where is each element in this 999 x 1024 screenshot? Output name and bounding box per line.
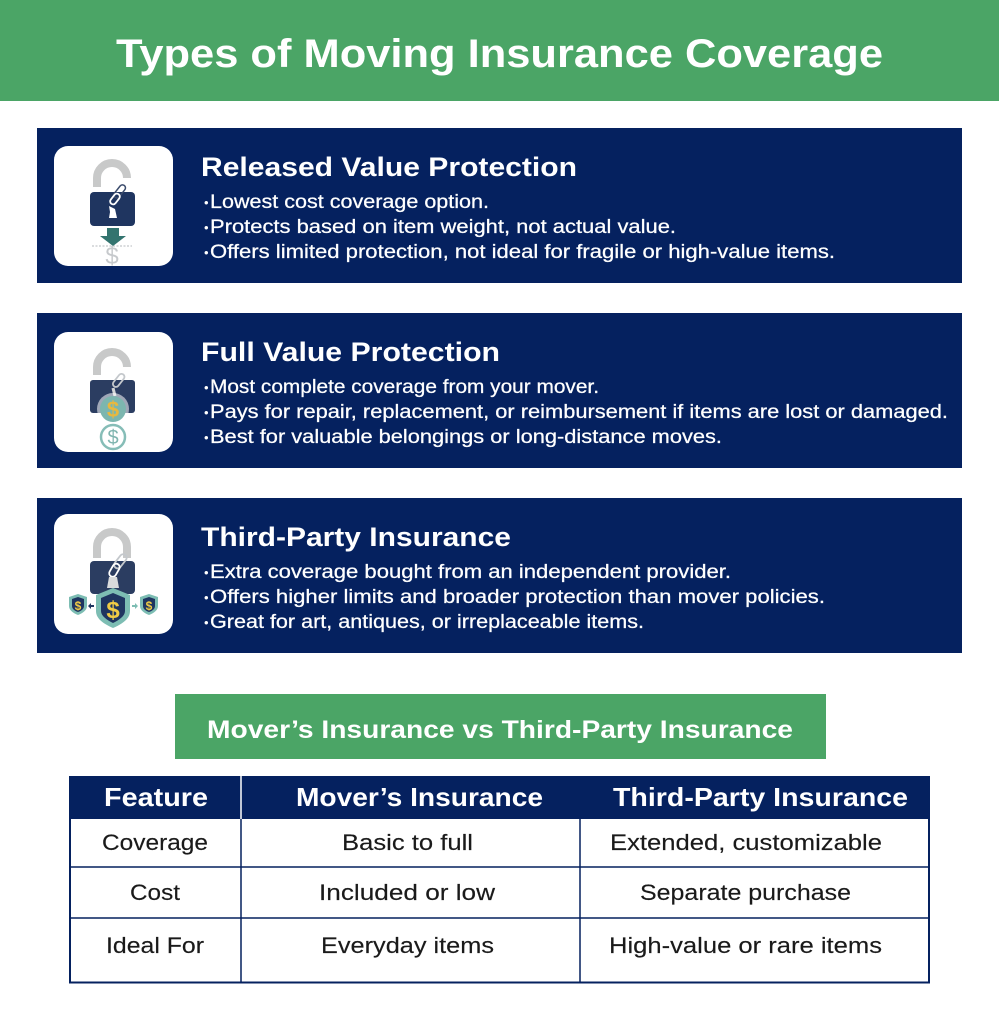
row: coverage: Basic to full: [342, 830, 473, 855]
bullet list: [204, 192, 835, 263]
row: cost: Cost: [130, 880, 180, 905]
row: cost: [130, 880, 851, 905]
row: cost: Included or low: [319, 880, 495, 905]
bullet list: •: [204, 405, 209, 420]
panel: full value protection: [37, 313, 962, 468]
bullet list: •: [204, 380, 209, 395]
bullet list: •: [204, 615, 209, 630]
icon: open padlock with down arrow and dollar: $: [105, 243, 119, 270]
row: coverage: [102, 830, 882, 855]
bullet list: Best for valuable belongings or long-distance moves.: [210, 427, 722, 448]
bullet list: •: [204, 565, 209, 580]
bullet list: •: [204, 245, 209, 260]
bullet list: •: [204, 220, 209, 235]
icon: padlock with dollar coins: [54, 332, 173, 452]
bullet list: Pays for repair, replacement, or reimbursement if items are lost or damaged.: [210, 402, 948, 423]
table header row: Feature: [104, 782, 208, 812]
panel: third-party insurance: [37, 498, 962, 653]
icon: padlock with shields: $: [75, 599, 82, 613]
bullet list: •: [204, 430, 209, 445]
table header row: [69, 776, 930, 819]
comparison heading: Mover’s Insurance vs Third-Party Insurance: [207, 716, 793, 744]
heading: Released Value Protection: [201, 152, 577, 182]
icon: open padlock with down arrow and dollar: [54, 146, 173, 270]
icon: padlock with shields: $: [146, 599, 153, 613]
row: ideal for: Ideal For: [106, 933, 204, 958]
bullet list: Offers limited protection, not ideal for fragile or high-value items.: [210, 242, 835, 263]
bullet list: •: [204, 195, 209, 210]
icon: padlock with dollar coins: $: [107, 427, 119, 449]
icon: right arrow: [132, 603, 138, 609]
row: ideal for: High-value or rare items: [609, 933, 882, 958]
bullet list: •: [204, 590, 209, 605]
bullet list: Great for art, antiques, or irreplaceable items.: [210, 612, 644, 633]
row: coverage: Coverage: [102, 830, 208, 855]
row: ideal for: Everyday items: [321, 933, 494, 958]
title: Types of Moving Insurance Coverage: [116, 32, 883, 76]
row: coverage: Extended, customizable: [610, 830, 882, 855]
heading: Third-Party Insurance: [201, 522, 511, 552]
bullet list: Extra coverage bought from an independent provider.: [210, 562, 731, 583]
bullet list: Protects based on item weight, not actual value.: [210, 217, 676, 238]
bullet list: Lowest cost coverage option.: [210, 192, 489, 213]
heading: Full Value Protection: [201, 337, 500, 367]
row: ideal for: [106, 933, 882, 958]
icon: padlock with shields: [54, 514, 173, 634]
bullet list: Most complete coverage from your mover.: [210, 377, 599, 398]
icon: padlock with shields: $: [106, 597, 120, 624]
panel: released value protection: [37, 128, 962, 283]
icon: left arrow: [88, 603, 94, 609]
bullet list: Offers higher limits and broader protection than mover policies.: [210, 587, 825, 608]
table header row: Third-Party Insurance: [613, 782, 908, 812]
title banner: [0, 0, 999, 101]
comparison table: [69, 776, 930, 983]
comparison heading: [175, 694, 826, 759]
table header row: Mover’s Insurance: [296, 782, 543, 812]
icon: padlock with dollar coins: $: [107, 397, 119, 422]
bullet list: [204, 562, 825, 633]
bullet list: [204, 377, 948, 448]
row: cost: Separate purchase: [640, 880, 851, 905]
